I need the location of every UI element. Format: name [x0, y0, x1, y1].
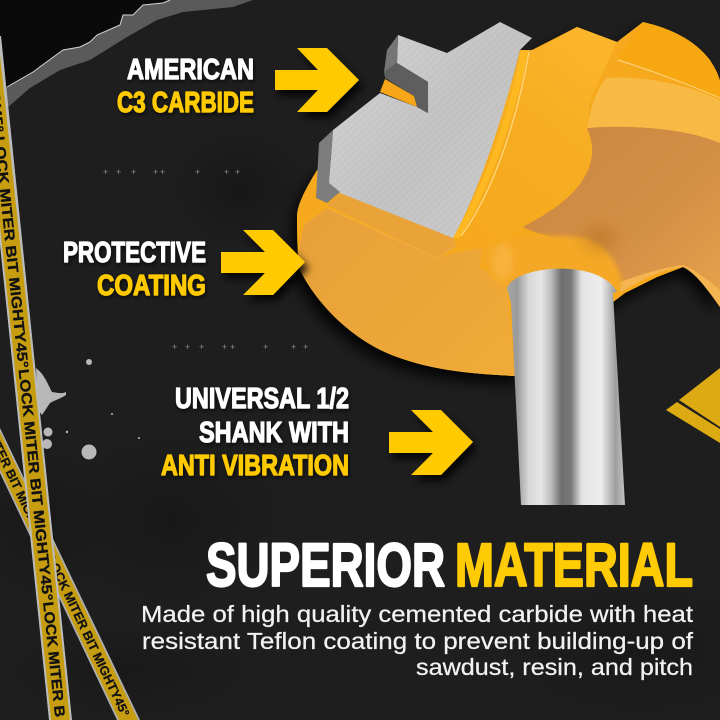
- label: Protective Coating: COATING: [97, 270, 206, 302]
- upper right light ridge: [587, 77, 720, 143]
- plus marks row 1: +: [116, 167, 121, 177]
- label: Universal shank: SHANK WITH: [199, 417, 349, 449]
- label: Universal shank: UNIVERSAL 1/2: [175, 383, 349, 415]
- description: Made of high quality cemented carbide with heat: [141, 601, 694, 627]
- plus marks row 1: +: [195, 167, 200, 177]
- plus marks row 1: +: [235, 167, 240, 177]
- router bit: [297, 22, 720, 505]
- tape: rear diagonal: [0, 392, 140, 720]
- plus marks row 2: [172, 342, 308, 352]
- upper right fin: [618, 22, 720, 100]
- heading: [206, 531, 693, 599]
- label: American C3 Carbide: AMERICAN: [127, 54, 254, 86]
- plus marks row 1: +: [153, 167, 158, 177]
- arrow 3: [389, 410, 473, 475]
- bit body silhouette: [297, 22, 720, 376]
- plus marks row 2: +: [172, 342, 177, 352]
- description: [141, 601, 694, 680]
- ridge under carbide: [327, 193, 457, 258]
- disc lower face: [299, 208, 515, 376]
- plus marks row 1: [103, 167, 240, 177]
- heading: SUPERIOR: [206, 531, 445, 599]
- arrow 2: [221, 230, 305, 295]
- tape: front long: [0, 36, 72, 720]
- lower right rim: [620, 265, 720, 307]
- plus marks row 2: +: [303, 342, 308, 352]
- shank: [507, 269, 625, 505]
- neck around shank: [482, 236, 622, 292]
- label: American C3 Carbide: C3 CARBIDE: [117, 87, 254, 119]
- plus marks row 1: +: [160, 167, 165, 177]
- carbide dark faces: [384, 35, 398, 72]
- plus marks row 1: +: [103, 167, 108, 177]
- plus marks row 2: +: [199, 342, 204, 352]
- plus marks row 1: +: [224, 167, 229, 177]
- label: Protective Coating: PROTECTIVE: [63, 237, 206, 269]
- yellow diamond corner: [666, 368, 720, 443]
- plus marks row 2: +: [263, 342, 268, 352]
- tape: rear diagonal: LOCK MITER BIT MIGHTY45°: [44, 554, 132, 719]
- plus marks row 2: +: [185, 342, 190, 352]
- torn paper corner: [0, 0, 253, 112]
- description: sawdust, resin, and pitch: [416, 654, 693, 680]
- plus marks row 2: +: [230, 342, 235, 352]
- paint splatter: [36, 359, 140, 460]
- carbide insert: [329, 22, 532, 238]
- plus marks row 2: +: [222, 342, 227, 352]
- label: Universal shank: [161, 383, 349, 482]
- label: Protective Coating: [63, 237, 206, 302]
- flank beside carbide: [453, 27, 617, 246]
- description: resistant Teflon coating to prevent building-up of: [142, 628, 694, 654]
- tape: front long: LOCK MITER B: [39, 601, 67, 718]
- label: Universal shank: ANTI VIBRATION: [161, 450, 349, 482]
- plus marks row 1: +: [131, 167, 136, 177]
- plus marks row 2: +: [291, 342, 296, 352]
- underside dark orange: [523, 127, 720, 290]
- tape: front long: LOCK MITER BIT MIGHTY45°: [15, 368, 55, 602]
- arrow 1: [275, 48, 359, 112]
- notch orange: [380, 79, 417, 107]
- label: American C3 Carbide: [117, 54, 254, 119]
